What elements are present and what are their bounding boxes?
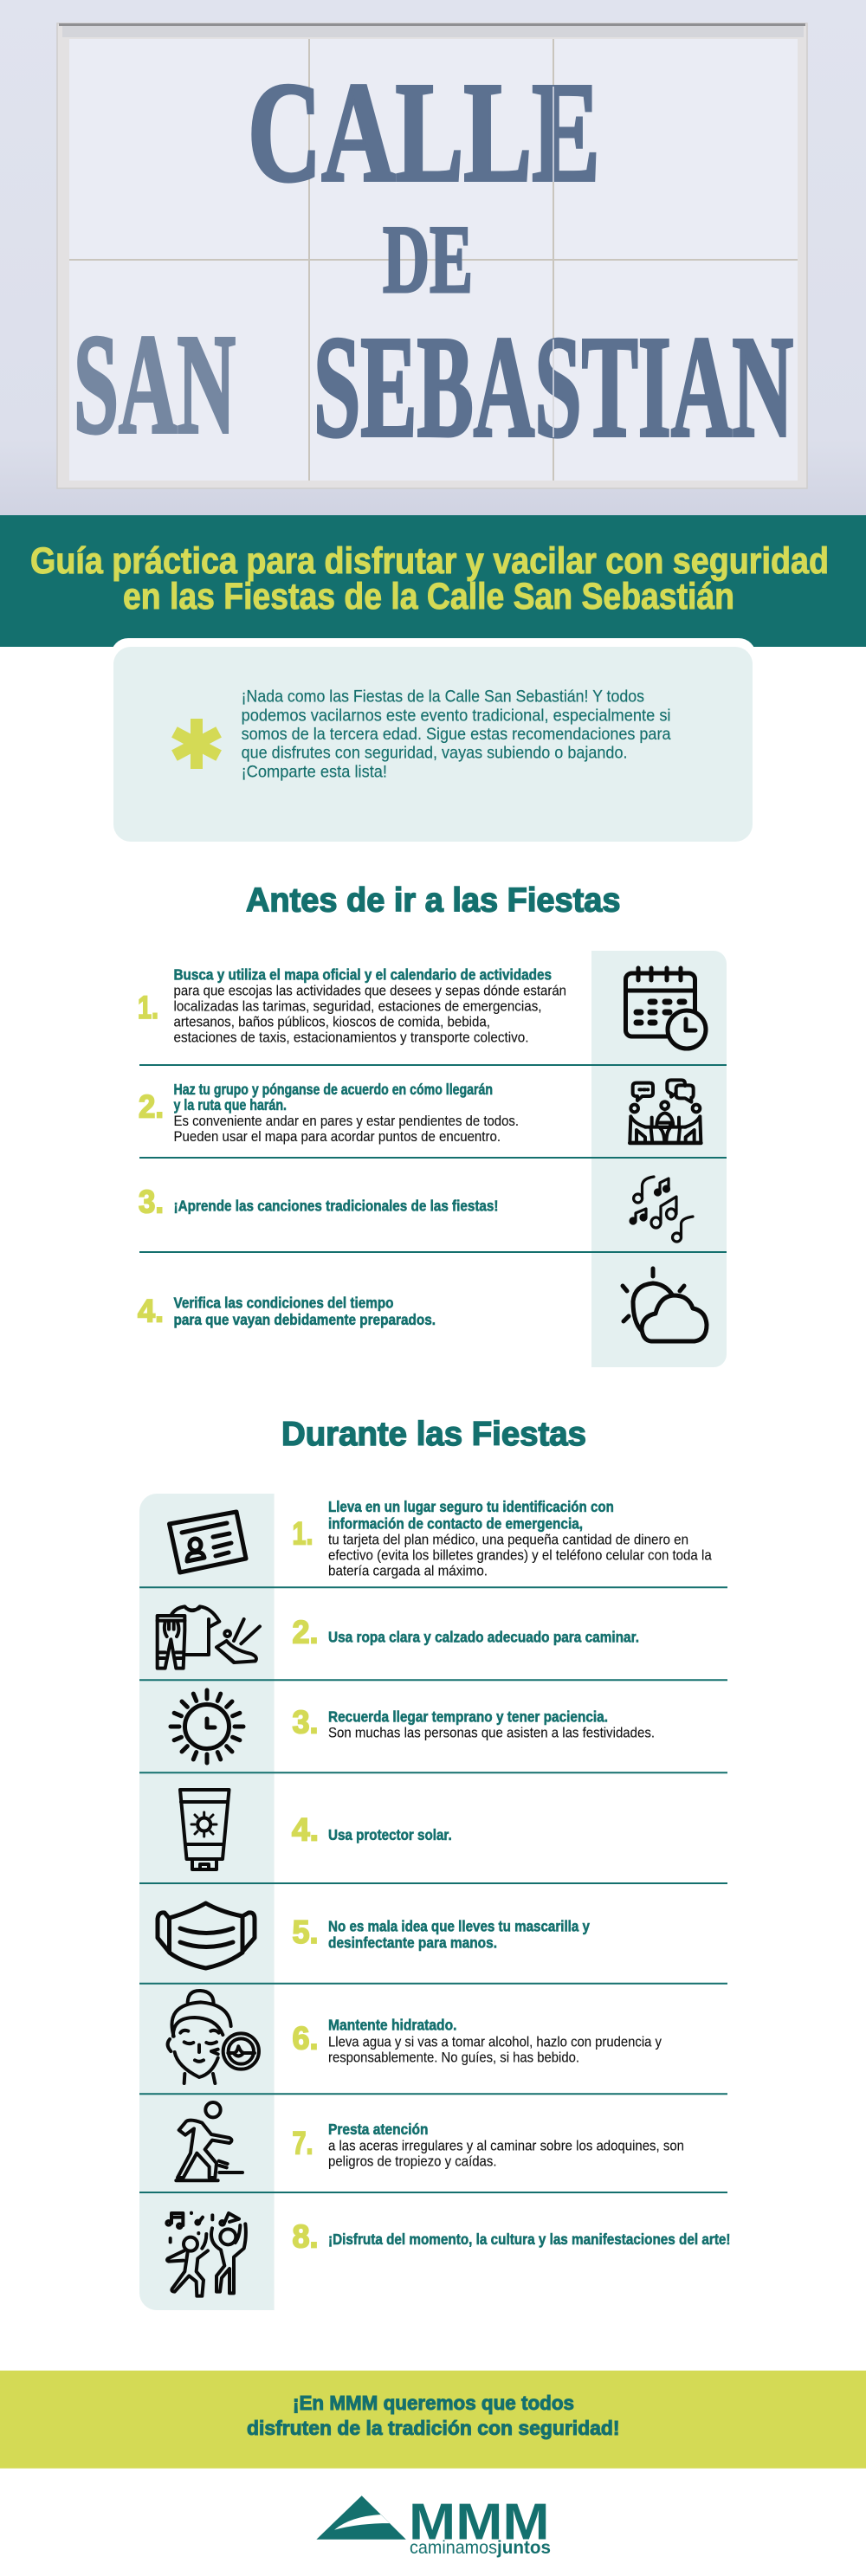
intro text: ¡Comparte esta lista! (242, 762, 387, 781)
sign text: SAN: SAN (74, 305, 236, 463)
icon: face with water drop (168, 1991, 259, 2083)
durante item 2 (158, 1606, 639, 1669)
text 5: No es mala idea que lleves tu mascarilla y (328, 1918, 590, 1935)
closing banner (0, 2371, 866, 2469)
title line 2: en las Fiestas de la Calle San Sebastián (123, 576, 734, 617)
sign text: CALLE: CALLE (248, 53, 600, 211)
text 7: peligros de tropiezo y caídas. (328, 2154, 497, 2170)
durante item 1 (170, 1498, 712, 1579)
banner text: ¡En MMM queremos que todos (293, 2392, 574, 2414)
icon: clothes and shoe (158, 1606, 260, 1669)
text 6: responsablemente. No guíes, si has bebido. (328, 2050, 579, 2065)
hero photo: street tile sign (0, 0, 866, 515)
antes item 1 (138, 966, 706, 1049)
text 3: ¡Aprende las canciones tradicionales de las fiestas! (173, 1197, 499, 1214)
intro text: podemos vacilarnos este evento tradicional, especialmente si (242, 706, 670, 725)
icon: group at table (630, 1080, 701, 1143)
banner text: disfruten de la tradición con seguridad! (247, 2417, 620, 2439)
banner text (247, 2392, 620, 2439)
number 3: 3. (139, 1185, 164, 1220)
icon: face mask (158, 1903, 255, 1968)
durante item 4 (180, 1790, 452, 1869)
number 6: 6. (293, 2021, 319, 2056)
text 1: Busca y utiliza el mapa oficial y el calendario de actividades (173, 966, 552, 984)
durante item 7 (176, 2102, 684, 2180)
title band (0, 515, 866, 647)
panel: antes icon column (591, 951, 727, 1367)
text 2: Es conveniente andar en pares y estar pendientes de todos. (173, 1114, 519, 1129)
number 8: 8. (293, 2219, 319, 2255)
panel: durante icon column (139, 1494, 275, 2310)
icon: walking person tripping (176, 2102, 242, 2180)
antes item 2 (139, 1080, 701, 1145)
logo: MMM caminamos juntos (316, 2494, 551, 2558)
text 3: Son muchas las personas que asisten a las festividades. (328, 1726, 655, 1741)
text 6: Lleva agua y si vas a tomar alcohol, hazlo con prudencia y (328, 2034, 662, 2050)
logo tagline: juntos: juntos (496, 2538, 551, 2558)
intro text: ¡Nada como las Fiestas de la Calle San Sebastián! Y todos (242, 688, 644, 707)
text 7 (328, 2121, 684, 2170)
text 1: información de contacto de emergencia, (328, 1514, 583, 1532)
number 1: 1. (293, 1515, 313, 1551)
heading: Durante las Fiestas: Durante las Fiestas (281, 1416, 586, 1453)
durante item 3 (171, 1690, 655, 1763)
text 2: Usa ropa clara y calzado adecuado para caminar. (328, 1629, 639, 1646)
text 7: Presta atención (328, 2121, 428, 2138)
text 4: Verifica las condiciones del tiempo (173, 1294, 393, 1312)
text 7: a las aceras irregulares y al caminar sobre los adoquines, son (328, 2138, 684, 2153)
intro text (242, 688, 671, 781)
text 1: Lleva en un lugar seguro tu identificación con (328, 1498, 614, 1515)
text 1: efectivo (evita los billetes grandes) y el teléfono celular con toda la (328, 1547, 712, 1563)
number 1: 1. (138, 990, 158, 1025)
icon: id card (170, 1512, 246, 1572)
sign text: DE: DE (383, 206, 473, 313)
durante item 5 (158, 1903, 590, 1968)
text 1 (173, 966, 566, 1045)
antes item 4 (138, 1269, 707, 1341)
text 6: Mantente hidratado. (328, 2016, 457, 2033)
text 6 (328, 2016, 662, 2065)
icon: dancing people (166, 2213, 246, 2296)
number 4: 4. (292, 1812, 319, 1848)
icon: sun clock (171, 1690, 243, 1763)
text 1: batería cargada al máximo. (328, 1563, 488, 1579)
icon: music notes (630, 1177, 693, 1242)
text 1: estaciones de taxis, estacionamientos y transporte colectivo. (173, 1030, 528, 1045)
text 1: artesanos, baños públicos, kioscos de comida, bebida, (173, 1014, 490, 1030)
icon: sun and cloud (623, 1269, 707, 1341)
text 5: desinfectante para manos. (328, 1934, 497, 1951)
text 2: Pueden usar el mapa para acordar puntos de encuentro. (173, 1129, 501, 1145)
text 1: para que escojas las actividades que desees y sepas dónde estarán (173, 983, 566, 998)
text 5 (328, 1918, 590, 1951)
text 3 (328, 1708, 655, 1741)
number 5: 5. (293, 1914, 319, 1950)
number 2: 2. (293, 1614, 319, 1650)
intro text: que disfrutes con seguridad, vayas subiendo o bajando. (242, 743, 627, 762)
text 8: ¡Disfruta del momento, la cultura y las manifestaciones del arte! (328, 2231, 731, 2248)
text 4: Usa protector solar. (328, 1826, 452, 1843)
logo tagline: caminamos: caminamos (410, 2538, 497, 2558)
durante item 8 (166, 2213, 730, 2296)
text 4: para que vayan debidamente preparados. (173, 1311, 436, 1328)
heading: Antes de ir a las Fiestas: Antes de ir a las Fiestas (246, 881, 620, 919)
number 7: 7. (293, 2125, 313, 2160)
icon: sunscreen tube (180, 1790, 229, 1869)
text 2: Haz tu grupo y pónganse de acuerdo en cómo llegarán (173, 1081, 493, 1098)
logo text: MMM: MMM (409, 2494, 550, 2551)
number 4: 4. (138, 1294, 164, 1329)
icon: asterisk (171, 719, 222, 769)
antes item 3 (139, 1177, 693, 1242)
intro text: somos de la tercera edad. Sigue estas recomendaciones para (242, 725, 671, 744)
text 1: tu tarjeta del plan médico, una pequeña cantidad de dinero en (328, 1532, 688, 1547)
intro panel (111, 638, 756, 842)
durante item 6 (168, 1991, 662, 2083)
number 2: 2. (139, 1089, 164, 1125)
text 3: Recuerda llegar temprano y tener paciencia. (328, 1708, 608, 1726)
text 1: localizadas las tarimas, seguridad, estaciones de emergencias, (173, 998, 542, 1014)
text 4 (173, 1294, 436, 1328)
number 3: 3. (293, 1705, 319, 1740)
icon: calendar (625, 968, 706, 1049)
logo mark: triangle (316, 2495, 406, 2540)
text 2 (173, 1081, 519, 1145)
text 1 (328, 1498, 712, 1579)
text 2: y la ruta que harán. (173, 1096, 287, 1114)
